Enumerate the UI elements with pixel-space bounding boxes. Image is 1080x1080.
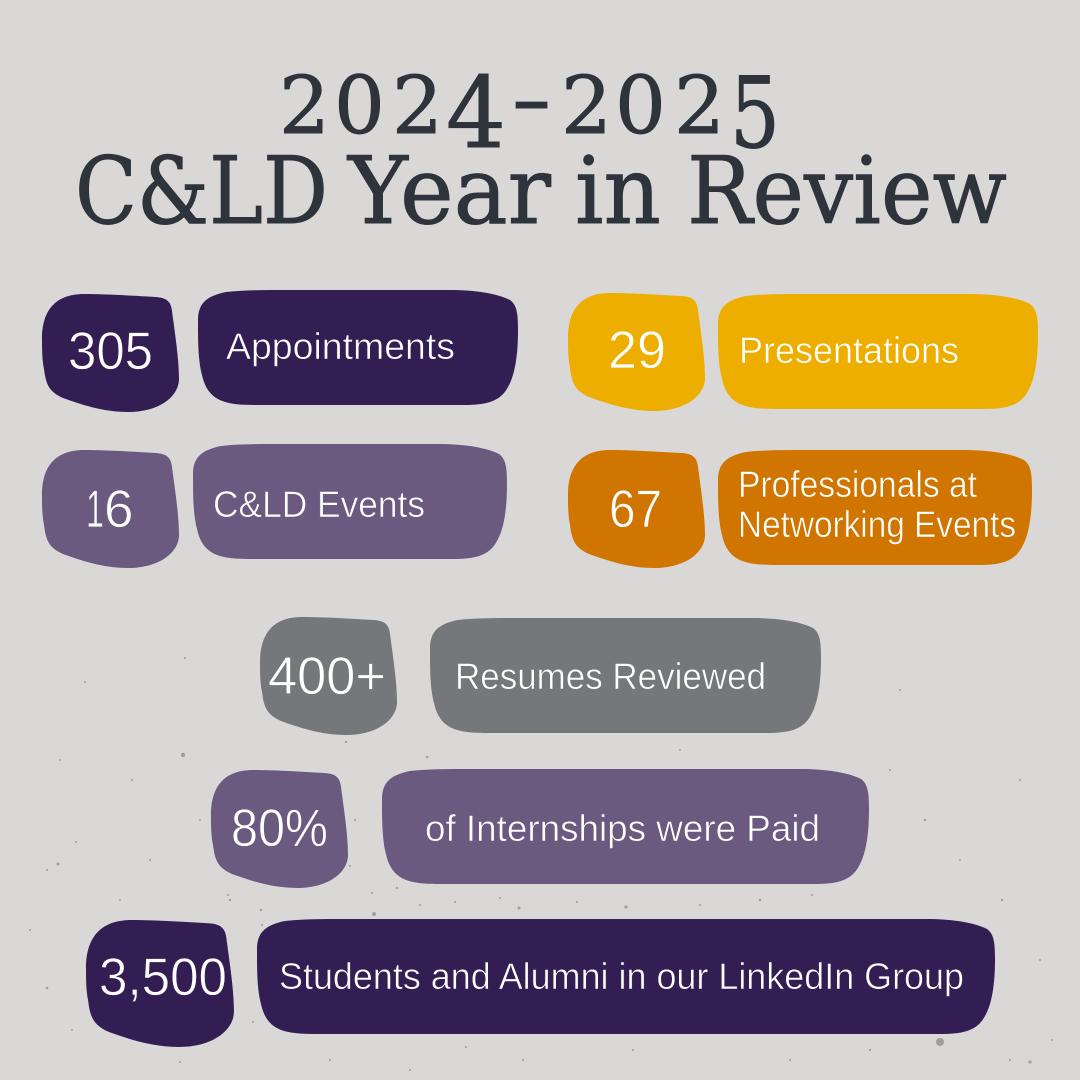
number badge: 3,500 — [86, 920, 234, 1047]
label: C&LD Events: C&LD Events — [213, 484, 425, 525]
number badge: 3,500: 3,500 — [99, 948, 227, 1007]
title: 0 — [615, 59, 666, 152]
number badge: 16: 6 — [104, 480, 133, 539]
title: 5 — [730, 57, 780, 171]
label: C&LD Events — [193, 444, 507, 559]
number badge: 400+ — [260, 617, 397, 735]
number badge: 305 — [42, 294, 179, 412]
stat: 400+ resumes — [260, 617, 821, 735]
stat: 16 events — [42, 444, 507, 568]
label: Professionals at Networking Events: Networking Events — [738, 504, 1016, 545]
number badge: 80% — [211, 770, 348, 888]
number badge: 67: 67 — [609, 480, 662, 539]
label: Presentations — [718, 294, 1038, 409]
label: Students and Alumni in our LinkedIn Group — [257, 919, 995, 1034]
number badge: 29 — [568, 293, 705, 411]
label: Professionals at Networking Events — [718, 450, 1032, 565]
title: C&LD — [75, 137, 328, 245]
label: Students and Alumni in our LinkedIn Group: Students and Alumni in our LinkedIn Group — [279, 956, 964, 997]
number badge: 29: 29 — [608, 321, 666, 380]
title: in — [575, 137, 661, 245]
stat: 305 appointments — [42, 290, 518, 412]
number badge: 305: 305 — [68, 322, 153, 381]
title: Review — [687, 137, 1007, 245]
label: Resumes Reviewed: Resumes Reviewed — [455, 656, 766, 697]
stat: 67 professionals — [568, 450, 1032, 568]
title: 0 — [334, 59, 385, 152]
title — [75, 55, 1007, 245]
label: Appointments — [198, 290, 518, 405]
number badge: 80%: 80% — [231, 799, 328, 858]
number badge: 400+: 400+ — [268, 647, 386, 706]
title: Year — [346, 137, 552, 245]
label: of Internships were Paid — [382, 769, 869, 884]
label: Appointments: Appointments — [226, 326, 455, 367]
number badge: 16: 1 — [86, 480, 104, 539]
title: 2 — [561, 59, 612, 152]
stat: 80% paid internships — [211, 769, 869, 888]
stat: 29 presentations — [568, 293, 1038, 411]
title: - — [511, 55, 552, 145]
stat: 3,500 LinkedIn group — [86, 919, 995, 1047]
title: 2 — [674, 59, 725, 152]
label: of Internships were Paid: of Internships were Paid — [425, 808, 820, 849]
number badge: 16 — [42, 450, 179, 568]
title: 2 — [279, 59, 330, 152]
label: Professionals at Networking Events: Professionals at — [738, 464, 978, 505]
title: 2 — [392, 59, 443, 152]
number badge: 67 — [568, 450, 705, 568]
title: 4 — [446, 57, 506, 171]
label: Resumes Reviewed — [430, 618, 821, 733]
label: Presentations: Presentations — [739, 330, 959, 371]
